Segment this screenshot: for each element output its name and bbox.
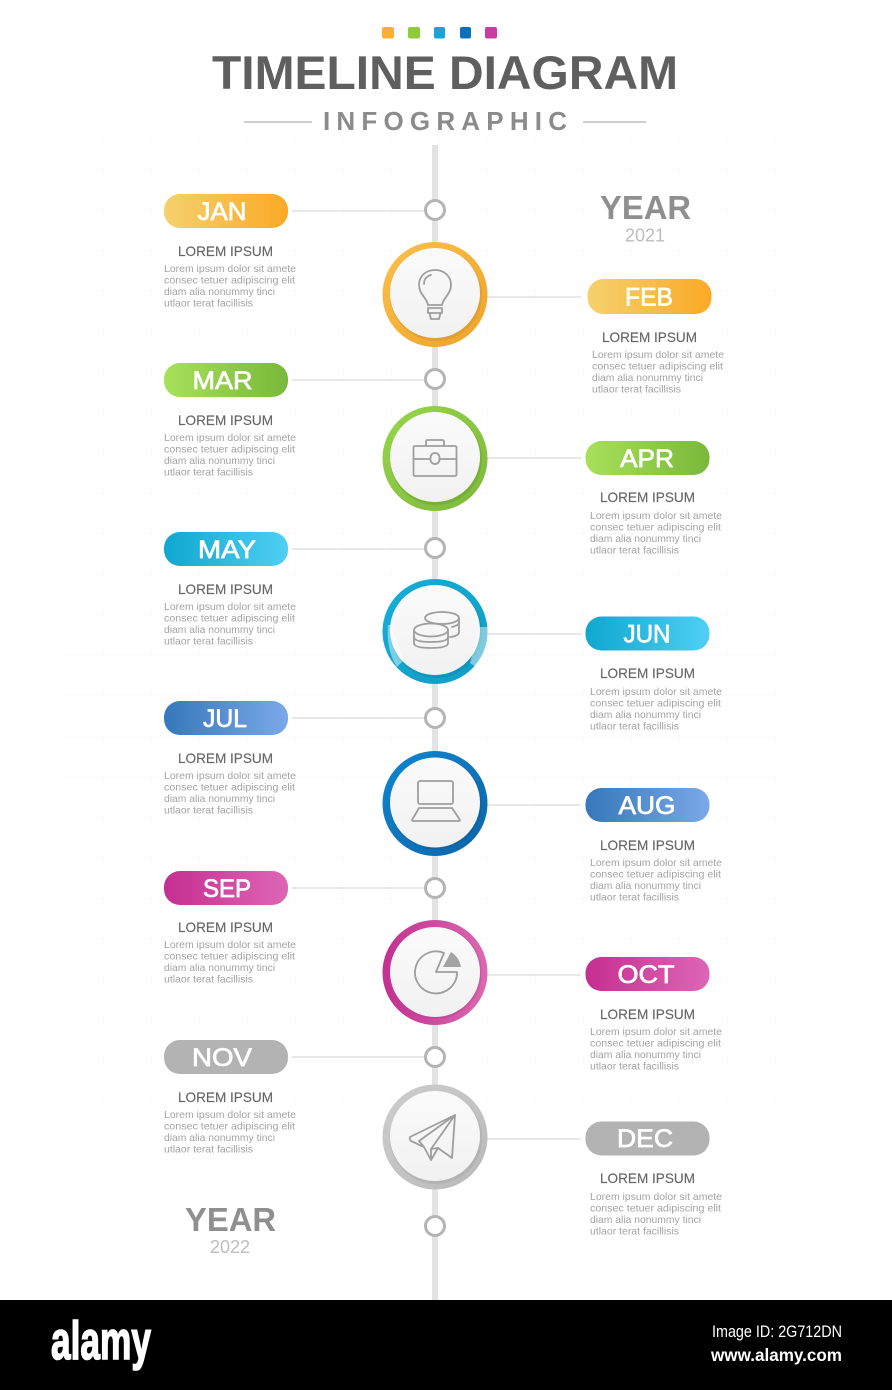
year 2021: YEAR [600, 189, 691, 226]
circle: coins [382, 579, 488, 684]
month: AUG: AUG [618, 792, 676, 820]
month: MAR: MAR [192, 367, 252, 395]
year 2021: 2021 [625, 226, 665, 246]
month: AUG: diam alia nonummy tinci [590, 880, 701, 892]
month: JUN [586, 616, 722, 732]
month: DEC [586, 1122, 722, 1238]
month: FEB: utlaor terat facillisis [592, 384, 681, 396]
year 2022: YEAR [185, 1201, 276, 1238]
icon: pie chart [415, 951, 461, 993]
month: APR [586, 441, 722, 556]
month: JUN: diam alia nonummy tinci [590, 709, 701, 721]
month: MAY: Lorem ipsum dolor sit amete [164, 601, 296, 613]
connector: MAY [292, 548, 424, 550]
month: JUL [164, 701, 296, 816]
month: FEB: LOREM IPSUM [602, 329, 697, 345]
circle: paper plane [382, 1084, 488, 1190]
connector: AUG [486, 804, 581, 806]
month: NOV: utlaor terat facillisis [164, 1144, 253, 1156]
connector: DEC [486, 1138, 581, 1140]
year 2021 [600, 189, 691, 246]
month: MAY: utlaor terat facillisis [164, 636, 253, 648]
month: DEC: diam alia nonummy tinci [590, 1214, 701, 1226]
image id: Image ID: 2G712DN [712, 1322, 842, 1341]
month: NOV: Lorem ipsum dolor sit amete [164, 1109, 296, 1121]
month: JAN: JAN [198, 198, 246, 226]
node: JAN [426, 200, 444, 220]
month: MAY: consec tetuer adipiscing elit [164, 612, 295, 624]
connector: FEB [486, 296, 581, 298]
month: NOV: consec tetuer adipiscing elit [164, 1120, 295, 1132]
month: APR: LOREM IPSUM [600, 489, 695, 505]
month: APR: consec tetuer adipiscing elit [590, 522, 721, 534]
month: AUG: Lorem ipsum dolor sit amete [590, 857, 722, 869]
month: SEP: LOREM IPSUM [178, 919, 273, 935]
month: JUN: LOREM IPSUM [600, 665, 695, 681]
month: SEP: Lorem ipsum dolor sit amete [164, 939, 296, 951]
month: MAY: diam alia nonummy tinci [164, 624, 275, 636]
connector: JAN [292, 210, 424, 212]
month: JAN: LOREM IPSUM [178, 243, 273, 259]
month: JAN: consec tetuer adipiscing elit [164, 274, 295, 286]
month: JUL: diam alia nonummy tinci [164, 793, 275, 805]
month: NOV: diam alia nonummy tinci [164, 1132, 275, 1144]
circle: pie chart [382, 920, 488, 1025]
icon: laptop [412, 781, 460, 821]
circle: briefcase [382, 406, 488, 511]
month: OCT: diam alia nonummy tinci [590, 1049, 701, 1061]
month: SEP: SEP [203, 875, 251, 903]
month: FEB [588, 279, 724, 396]
connector: MAR [292, 379, 424, 381]
month: FEB: diam alia nonummy tinci [592, 372, 703, 384]
month: NOV: NOV [192, 1044, 252, 1072]
month: JAN: diam alia nonummy tinci [164, 286, 275, 298]
month: JAN: utlaor terat facillisis [164, 298, 253, 310]
connector: NOV [292, 1056, 424, 1058]
month: AUG: utlaor terat facillisis [590, 892, 679, 904]
month: MAY: MAY [198, 536, 256, 564]
month: JUL: Lorem ipsum dolor sit amete [164, 770, 296, 782]
month: JAN [164, 194, 296, 310]
month: MAR [164, 363, 296, 478]
node: SEP [426, 878, 444, 898]
month: FEB: Lorem ipsum dolor sit amete [592, 349, 724, 361]
month: DEC: LOREM IPSUM [600, 1170, 695, 1186]
month: APR: utlaor terat facillisis [590, 544, 679, 556]
month: APR: Lorem ipsum dolor sit amete [590, 510, 722, 522]
month: MAR: utlaor terat facillisis [164, 466, 253, 478]
month: MAR: Lorem ipsum dolor sit amete [164, 432, 296, 444]
end node [426, 1216, 444, 1236]
month: JUL: utlaor terat facillisis [164, 804, 253, 816]
month: JUN: JUN [624, 620, 670, 648]
month: SEP [164, 871, 296, 986]
year 2022: 2022 [210, 1237, 250, 1257]
node: MAY [426, 538, 444, 558]
connector: OCT [486, 974, 581, 976]
icon: coins [414, 612, 459, 648]
month: JUL: LOREM IPSUM [178, 750, 273, 766]
month: JUN: utlaor terat facillisis [590, 720, 679, 732]
connector: JUN [486, 633, 581, 635]
month: OCT: LOREM IPSUM [600, 1006, 695, 1022]
year 2022 [185, 1201, 276, 1257]
node: NOV [426, 1048, 444, 1066]
month: APR: APR [620, 445, 674, 473]
month: DEC: utlaor terat facillisis [590, 1226, 679, 1238]
month: MAR: consec tetuer adipiscing elit [164, 444, 295, 456]
footer url: www.alamy.com [710, 1345, 842, 1365]
month: NOV: LOREM IPSUM [178, 1089, 273, 1105]
month: AUG: LOREM IPSUM [600, 837, 695, 853]
icon: briefcase [414, 440, 456, 476]
month: MAY [164, 532, 296, 648]
month: JAN: Lorem ipsum dolor sit amete [164, 263, 296, 275]
month: AUG: consec tetuer adipiscing elit [590, 868, 721, 880]
month: JUN: Lorem ipsum dolor sit amete [590, 686, 722, 698]
month: JUL: JUL [203, 705, 247, 733]
icon: paper plane [410, 1115, 455, 1160]
month: MAR: diam alia nonummy tinci [164, 455, 275, 467]
month: JUL: consec tetuer adipiscing elit [164, 782, 295, 794]
month: MAR: LOREM IPSUM [178, 412, 273, 428]
node: MAR [426, 370, 444, 388]
month: OCT [586, 957, 722, 1072]
month: NOV [164, 1040, 296, 1156]
month: OCT: utlaor terat facillisis [590, 1060, 679, 1072]
month: OCT: Lorem ipsum dolor sit amete [590, 1026, 722, 1038]
month: FEB: FEB [625, 284, 673, 312]
month: DEC: consec tetuer adipiscing elit [590, 1202, 721, 1214]
title: TIMELINE DIAGRAM [212, 46, 678, 99]
month: MAY: LOREM IPSUM [178, 581, 273, 597]
footer logo: alamy [51, 1311, 151, 1371]
month: SEP: diam alia nonummy tinci [164, 962, 275, 974]
node: JUL [426, 708, 444, 728]
month: FEB: consec tetuer adipiscing elit [592, 360, 723, 372]
month: APR: diam alia nonummy tinci [590, 533, 701, 545]
month: SEP: utlaor terat facillisis [164, 974, 253, 986]
footer bar [0, 1300, 892, 1390]
icon: lightbulb [419, 270, 451, 319]
color swatches [382, 27, 497, 38]
month: OCT: consec tetuer adipiscing elit [590, 1038, 721, 1050]
connector: JUL [292, 717, 424, 719]
circle: laptop [382, 751, 488, 856]
month: AUG [586, 788, 722, 904]
month: OCT: OCT [618, 961, 674, 989]
connector: SEP [292, 887, 424, 889]
subtitle: INFOGRAPHIC [323, 106, 567, 136]
month: JUN: consec tetuer adipiscing elit [590, 698, 721, 710]
timeline spine [432, 145, 438, 1300]
month: DEC: DEC [617, 1125, 673, 1153]
connector: APR [486, 457, 581, 459]
month: SEP: consec tetuer adipiscing elit [164, 950, 295, 962]
month: DEC: Lorem ipsum dolor sit amete [590, 1191, 722, 1203]
circle: lightbulb [382, 242, 488, 347]
